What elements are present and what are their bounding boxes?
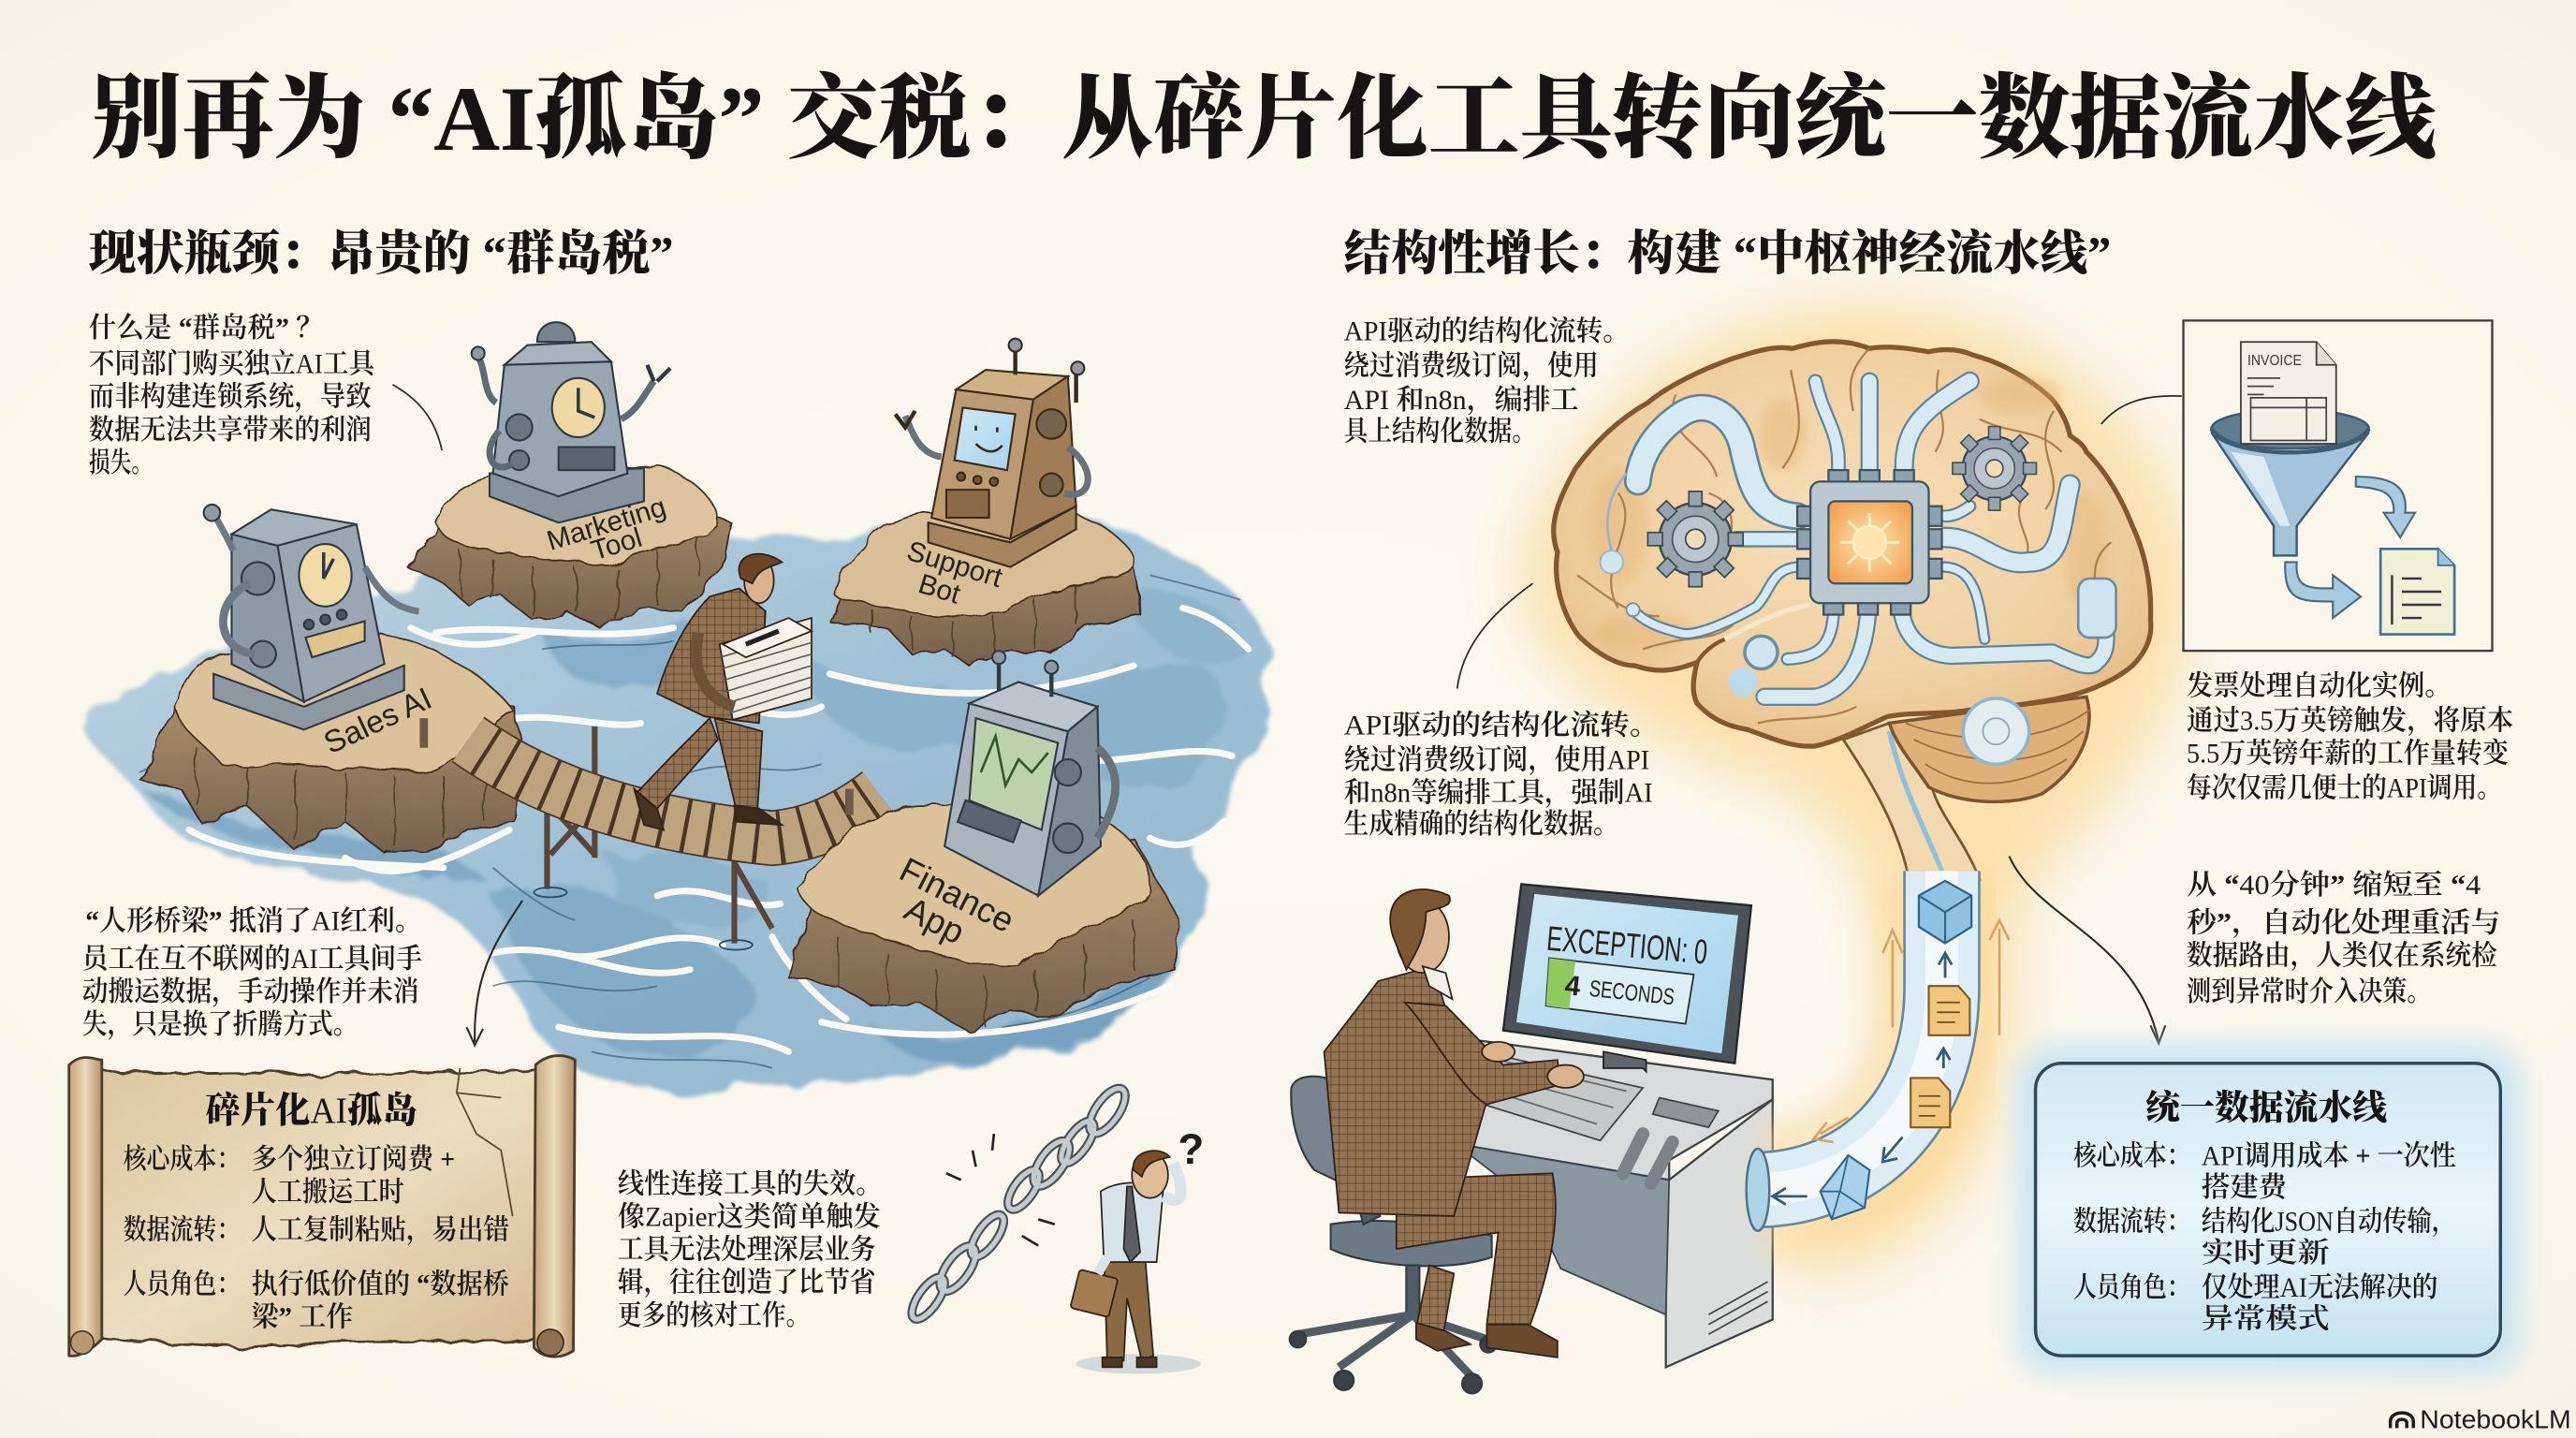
callout: linear connector failure: 工具无法处理深层业务 <box>618 1235 876 1266</box>
callout: human bridge: 员工在互不联网的AI工具间手 <box>82 944 422 975</box>
callout: invoice automation: 每次仅需几便士的API调用。 <box>2187 772 2502 803</box>
callout: API structured flow top <box>1344 315 1630 448</box>
scroll rows: 多个独立订阅费 + <box>252 1144 455 1175</box>
panel: unified data pipeline <box>2017 1045 2520 1373</box>
callout: what is the island tax: 数据无法共享带来的利润 <box>89 415 372 446</box>
callout: linear connector failure: 辑，往往创造了比节省 <box>618 1268 877 1299</box>
illustration: analyst at computer <box>1290 884 1773 1393</box>
main title: 别再为 “AI孤岛” 交税：从碎片化工具转向统一数据流水线 <box>91 68 2437 170</box>
brain stem <box>1843 723 1980 879</box>
watercolor sea <box>85 508 1269 1093</box>
callout: API structured flow top: 绕过消费级订阅，使用 <box>1344 350 1599 382</box>
island: Marketing Tool <box>407 465 731 628</box>
callout: human bridge: “人形桥梁” 抵消了AI红利。 <box>85 906 422 937</box>
island labels: App <box>899 889 971 951</box>
desk cabinet <box>1456 1040 1773 1180</box>
illustration: data pipeline tube <box>1747 871 2009 1231</box>
island labels: Support <box>903 536 1006 594</box>
callout: invoice automation: 通过3.5万英镑触发，将原本 <box>2187 705 2513 737</box>
scroll rows: 梁” 工作 <box>252 1302 354 1333</box>
icon: broken chain <box>906 1083 1132 1324</box>
callout: linear connector failure: 线性连接工具的失效。 <box>618 1168 882 1199</box>
brain blotches <box>1588 374 2110 653</box>
scroll rows: 执行低价值的 “数据桥 <box>252 1269 509 1299</box>
callout: what is the island tax: 不同部门购买独立AI工具 <box>89 349 377 380</box>
robot: Sales AI <box>204 505 419 729</box>
callout: 40 minutes to 4 seconds: 秒”，自动化处理重活与 <box>2187 907 2500 939</box>
arrow: speed callout to unified box <box>2009 857 2165 1044</box>
callout: human bridge: 动搬运数据，手动操作并未消 <box>82 976 419 1008</box>
callout: invoice automation: 发票处理自动化实例。 <box>2187 671 2452 702</box>
wave strokes <box>189 609 1249 1051</box>
callout: 40 minutes to 4 seconds <box>2187 870 2500 1007</box>
invoice sheet <box>2241 342 2336 444</box>
connector: invoice panel to brain <box>2101 396 2182 424</box>
robot: Finance <box>944 651 1116 896</box>
robot: Support Bot <box>896 339 1088 567</box>
callout: 40 minutes to 4 seconds: 测到异常时介入决策。 <box>2187 976 2432 1007</box>
panel rows: 结构化JSON自动传输， <box>2202 1207 2456 1239</box>
island labels <box>319 492 1020 951</box>
connector: tax callout <box>392 385 442 450</box>
island labels: Sales AI <box>319 682 437 761</box>
panel rows <box>2073 1141 2456 1334</box>
panel rows: 仅处理AI无法解决的 <box>2202 1272 2438 1303</box>
callout: linear connector failure: 像Zapier这类简单触发 <box>618 1201 881 1232</box>
panel rows: API调用成本 + 一次性 <box>2202 1141 2456 1172</box>
cortex outline <box>1554 342 2151 746</box>
scroll rows: 数据流转： <box>124 1214 240 1245</box>
arrow: human bridge to scroll <box>466 901 522 1045</box>
gears <box>1647 492 1743 587</box>
orange side arrows <box>1814 920 2009 1142</box>
callout: invoice automation <box>2187 671 2513 803</box>
brain glow <box>1519 304 2193 1273</box>
funnel <box>2211 429 2369 555</box>
island: Sales AI <box>141 634 522 855</box>
robot: Marketing <box>472 322 670 522</box>
figure: confused man with briefcase <box>1070 1151 1201 1373</box>
callout: what is the island tax <box>89 313 377 478</box>
callout: API structured flow top: API 和n8n，编排工 <box>1344 385 1579 417</box>
callout: 40 minutes to 4 seconds: 数据路由，人类仅在系统检 <box>2187 940 2497 972</box>
figure: man carrying papers across the bridge <box>634 554 812 829</box>
panel rows: 核心成本： <box>2073 1141 2190 1172</box>
callout: API structured flow lower <box>1344 711 1660 840</box>
island labels: Bot <box>915 568 964 610</box>
funnel back rim <box>2211 409 2369 448</box>
callout: API structured flow lower: API驱动的结构化流转。 <box>1344 711 1660 741</box>
logo: NotebookLM: NotebookLM <box>2420 1404 2571 1433</box>
callout: API structured flow lower: 生成精确的结构化数据。 <box>1344 809 1618 840</box>
panel rows: 人员角色： <box>2073 1272 2190 1303</box>
callout: linear connector failure <box>618 1168 882 1331</box>
callout: invoice automation: 5.5万英镑年薪的工作量转变 <box>2187 739 2509 770</box>
scroll rows: 人工搬运工时 <box>252 1177 404 1208</box>
icon: question mark: ? <box>1178 1125 1204 1173</box>
callout: 40 minutes to 4 seconds: 从 “40分钟” 缩短至 “ 4 <box>2187 870 2481 901</box>
callout: API structured flow lower: 绕过消费级订阅，使用API <box>1344 745 1649 777</box>
monitor: SECONDS <box>1588 976 1676 1010</box>
callout: linear connector failure: 更多的核对工作。 <box>618 1300 810 1331</box>
arrows out of funnel <box>2285 477 2415 618</box>
seated man <box>1325 889 1584 1357</box>
keyboard <box>1462 1051 1643 1140</box>
panel rows: 数据流转： <box>2073 1207 2190 1238</box>
island: Support Bot <box>829 506 1142 666</box>
callout: human bridge <box>82 906 422 1041</box>
flow arrows <box>1773 953 1952 1205</box>
illustration: glowing brain <box>1519 304 2193 1273</box>
callout: human bridge: 失，只是换了折腾方式。 <box>82 1009 359 1041</box>
screen text: EXCEPTION: 0 <box>1545 919 1709 972</box>
callout: what is the island tax: 什么是 “群岛税” ？ <box>89 313 324 344</box>
chair <box>1290 1077 1497 1393</box>
heading: left section: 现状瓶颈：昂贵的 “群岛税” <box>89 227 674 281</box>
monitor <box>1503 884 1751 1071</box>
heading: right section: 结构性增长：构建 “中枢神经流水线” <box>1344 227 2111 281</box>
callout: what is the island tax: 损失。 <box>89 447 153 478</box>
island: Finance App <box>788 805 1179 1032</box>
pipeline icons <box>1919 881 1971 944</box>
scroll rows: 人员角色： <box>124 1269 240 1299</box>
callout: what is the island tax: 而非构建连锁系统，导致 <box>89 382 372 414</box>
scroll rows: 核心成本： <box>124 1144 240 1175</box>
panel rows: 实时更新 <box>2202 1238 2330 1269</box>
panel: fragmented AI islands scroll <box>69 1056 575 1357</box>
island labels: Marketing <box>543 492 669 557</box>
central chip <box>1797 470 1942 615</box>
bridge <box>424 718 879 950</box>
invoice sheet: INVOICE <box>2247 353 2302 369</box>
panel heading: 统一数据流水线 <box>2145 1088 2387 1126</box>
monitor: 4 <box>1563 970 1582 1003</box>
connector: lower API callout to brain <box>1457 583 1533 689</box>
neural pipes <box>1633 381 2106 697</box>
callout: API structured flow top: 具上结构化数据。 <box>1344 417 1536 448</box>
callout: API structured flow lower: 和n8n等编排工具，强制AI <box>1344 778 1653 810</box>
panel rows: 搭建费 <box>2202 1172 2289 1203</box>
panel: invoice funnel example <box>2184 320 2492 651</box>
scroll heading: 碎片化AI孤岛 <box>205 1091 417 1131</box>
island labels: Tool <box>588 522 646 566</box>
cerebellum <box>1889 697 2089 801</box>
output document <box>2380 549 2454 635</box>
callout: API structured flow top: API驱动的结构化流转。 <box>1344 315 1630 346</box>
panel rows: 异常模式 <box>2202 1303 2330 1334</box>
illustration: sea with islands <box>85 322 1269 1093</box>
sulci <box>1577 348 2111 723</box>
scroll rows: 人工复制粘贴，易出错 <box>252 1214 509 1246</box>
scroll rows <box>124 1144 509 1333</box>
island labels: Finance <box>894 850 1020 940</box>
